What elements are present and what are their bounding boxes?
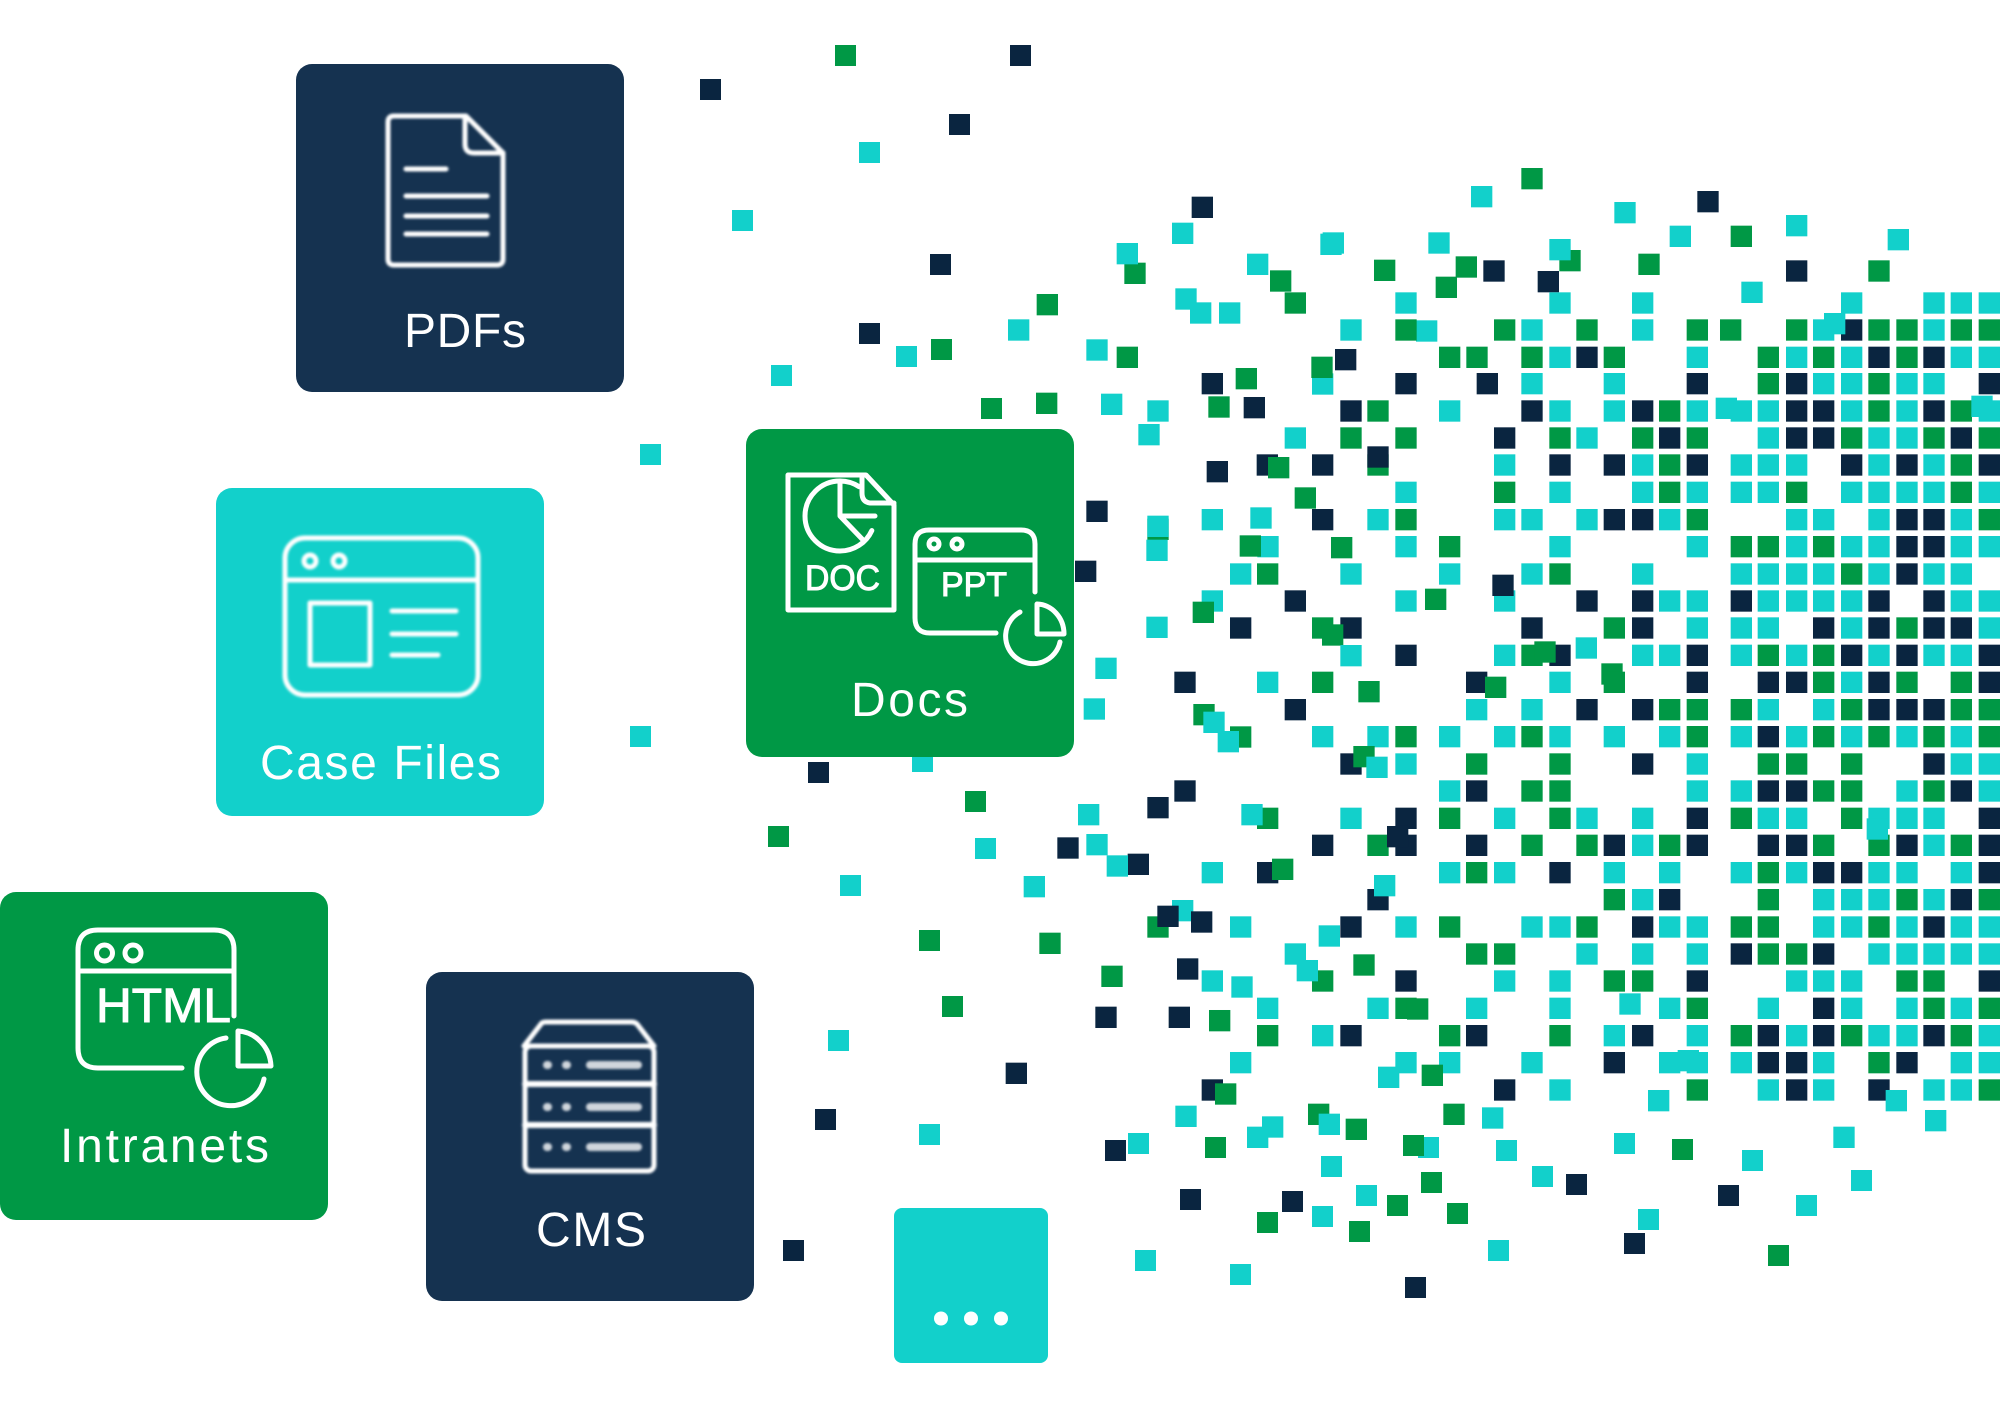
panel: CMS <box>426 972 754 1301</box>
panel: more sources <box>894 1208 1048 1363</box>
particle field: scattered squares left of the grid <box>630 45 1031 1261</box>
icon: DOC file with pie chart <box>788 475 894 610</box>
icon: PDF document <box>388 116 503 265</box>
icon: server rack <box>524 1022 654 1171</box>
particle field: upper middle squares <box>1008 186 1505 646</box>
icon: DOC file with pie chart: DOC <box>805 559 880 598</box>
icon: three dots <box>934 1312 1008 1326</box>
label: Case Files: Case Files <box>260 737 501 790</box>
panel: Docs <box>746 429 1074 757</box>
particle field: bottom scattered squares <box>1105 1133 1872 1298</box>
panel: Intranets <box>0 892 328 1220</box>
icon: PPT window with pie chart <box>915 530 1064 664</box>
icon: browser window layout <box>285 538 478 695</box>
label: CMS: CMS <box>536 1204 646 1257</box>
panel: Case Files <box>216 488 544 816</box>
icon: PPT window with pie chart: PPT <box>941 566 1007 604</box>
label: Intranets: Intranets <box>60 1120 269 1173</box>
icon: HTML window with pie chart: HTML <box>96 980 231 1033</box>
icon: HTML window with pie chart <box>78 930 271 1106</box>
label: PDFs: PDFs <box>404 305 526 358</box>
panel: PDFs <box>296 64 624 392</box>
particle field: lower middle squares <box>1006 645 1506 1148</box>
label: Docs: Docs <box>851 674 968 727</box>
particle field: lower right grid <box>1494 637 2000 1148</box>
particle field: upper right grid <box>1492 168 2000 639</box>
